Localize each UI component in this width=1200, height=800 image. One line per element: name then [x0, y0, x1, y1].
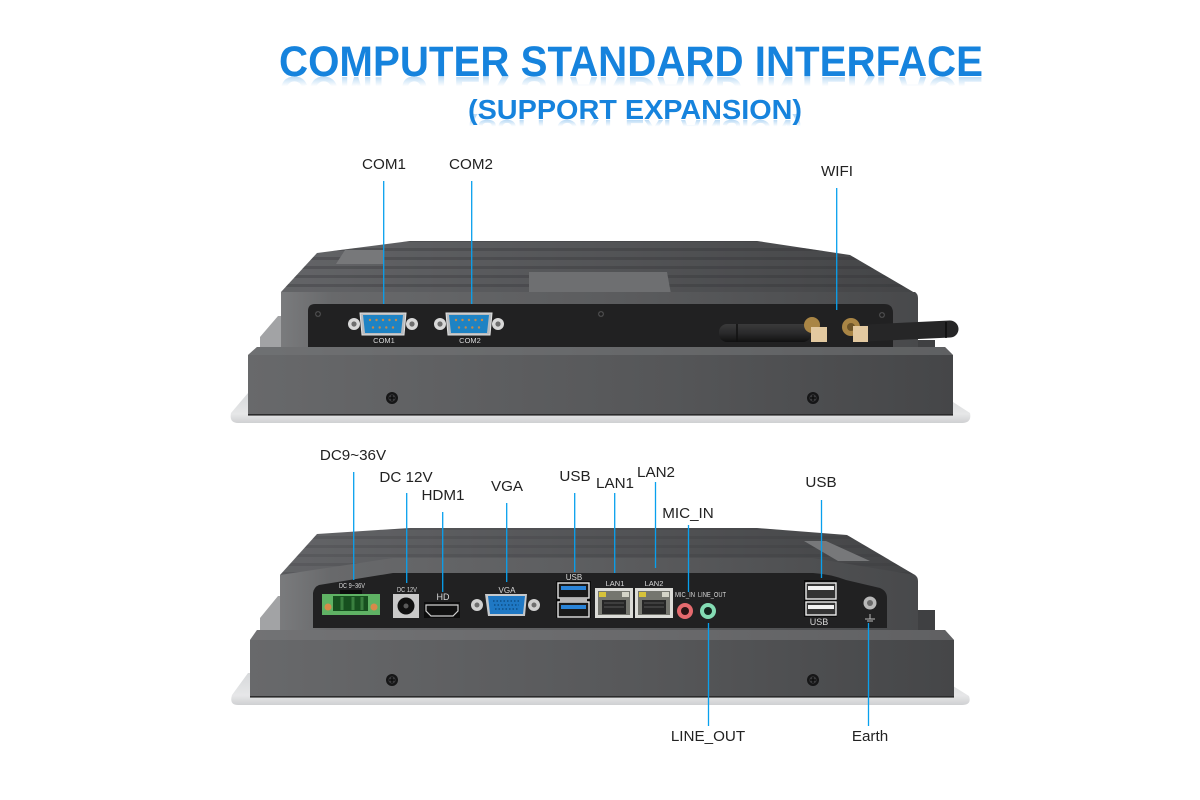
earth stud — [864, 596, 876, 621]
raised label plate — [804, 541, 870, 561]
mounting tabs — [260, 596, 285, 630]
rear cover top — [281, 241, 915, 293]
VGA port — [471, 586, 540, 616]
right WiFi antenna — [842, 318, 950, 342]
label: HDM1 — [421, 487, 465, 592]
silver front plate — [231, 673, 970, 705]
DC 12V jack — [393, 585, 419, 618]
lower housing — [250, 630, 954, 697]
label: USB rear: USB — [559, 468, 591, 485]
label: COM1: COM1 — [362, 156, 406, 173]
label: COM2: COM2 — [449, 156, 493, 173]
title — [279, 38, 983, 115]
label: LINE_OUT: LINE_OUT — [671, 728, 745, 745]
black port panel — [308, 304, 893, 347]
label: LAN2 — [637, 464, 675, 568]
MIC_IN jack: MIC_IN — [675, 590, 695, 599]
HDMI port: HD — [436, 592, 450, 602]
label: Earth — [852, 623, 888, 745]
label: MIC_IN: MIC_IN — [662, 505, 714, 522]
COM2 connector — [434, 313, 504, 345]
panel screws — [314, 310, 886, 320]
LINE_OUT jack — [698, 590, 726, 619]
dual USB 3.0 ports: USB — [566, 573, 582, 582]
power terminal DC 9-36V — [322, 581, 380, 615]
HDMI port — [424, 592, 460, 618]
COM1 connector: COM1 — [373, 336, 395, 345]
label: DC 12V: DC 12V — [379, 469, 433, 486]
dual USB 3.0 ports — [556, 573, 591, 618]
label: USB side — [805, 474, 837, 578]
label: LAN1: LAN1 — [596, 475, 634, 492]
label: LAN1 — [596, 475, 634, 573]
LINE_OUT jack: LINE_OUT — [698, 590, 726, 599]
rear cover top — [280, 528, 915, 575]
rear cover side band — [280, 558, 918, 630]
VGA port: VGA — [499, 586, 516, 595]
mounting tabs — [260, 316, 284, 347]
label: VGA: VGA — [491, 478, 524, 495]
COM2 connector: COM2 — [459, 336, 481, 345]
device: upper panel PC view — [231, 241, 970, 423]
label: LINE_OUT — [671, 623, 745, 745]
side USB ports — [804, 580, 837, 627]
COM1 connector — [348, 313, 418, 345]
LAN2 port: LAN2 — [645, 579, 663, 588]
label: Earth: Earth — [852, 728, 888, 745]
LAN1 port: LAN1 — [606, 579, 624, 588]
DC 12V jack: DC 12V — [397, 585, 417, 594]
left WiFi antenna — [719, 317, 827, 342]
LAN2 port — [635, 579, 673, 618]
label: DC 12V — [379, 469, 433, 583]
title reflection: COMPUTER STANDARD INTERFACE — [279, 67, 983, 115]
side USB ports: USB — [810, 617, 828, 627]
power terminal DC 9-36V: DC 9~36V — [339, 581, 365, 590]
housing screws — [386, 392, 819, 404]
housing screws — [386, 674, 819, 686]
rear cover side band — [281, 292, 918, 347]
LAN1 port — [595, 579, 633, 618]
raised label plate — [529, 272, 671, 294]
subtitle: (SUPPORT EXPANSION) — [468, 94, 802, 125]
silver front plate — [231, 393, 970, 423]
lower housing — [248, 347, 953, 415]
label: VGA — [491, 478, 524, 582]
label: HDM1: HDM1 — [421, 487, 465, 504]
label: MIC_IN — [662, 505, 714, 592]
label: USB rear — [559, 468, 591, 572]
subtitle — [468, 94, 802, 145]
device: lower panel PC view — [231, 528, 970, 705]
black port panel — [313, 573, 887, 628]
label: USB side: USB — [805, 474, 837, 491]
title: COMPUTER STANDARD INTERFACE — [279, 38, 983, 86]
subtitle reflection: (SUPPORT EXPANSION) — [468, 114, 802, 145]
label: LAN2: LAN2 — [637, 464, 675, 481]
MIC_IN jack — [675, 590, 695, 619]
label: WIFI: WIFI — [821, 163, 853, 180]
label: DC9~36V — [320, 447, 387, 580]
label: DC9~36V: DC9~36V — [320, 447, 387, 464]
